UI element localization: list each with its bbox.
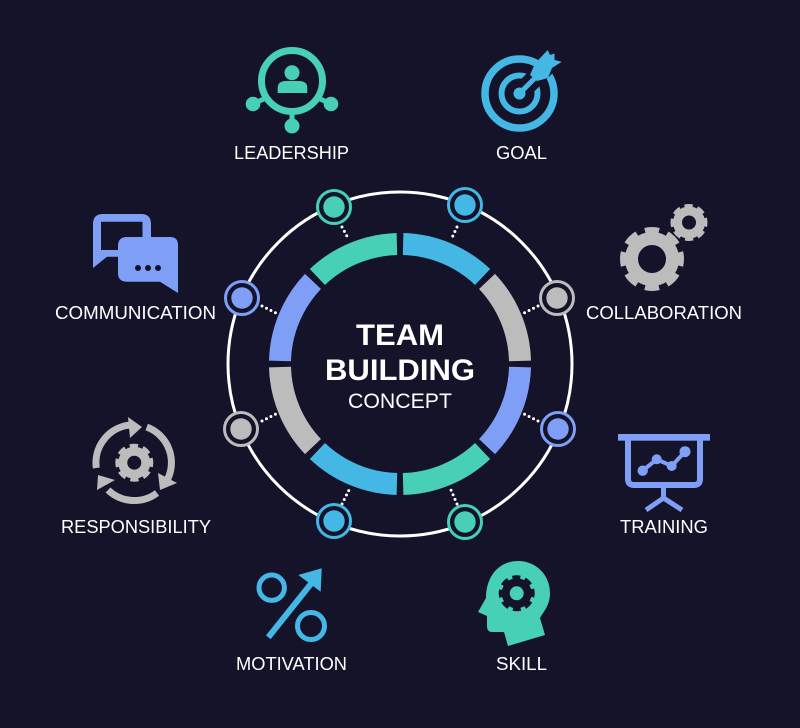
segmented donut [280,244,520,484]
node: leadership [318,190,350,224]
center title [325,319,475,413]
segment: lavender lower right [487,367,520,447]
segment: gray lower left [280,367,313,447]
node: communication [226,282,258,314]
label: skill: SKILL [496,654,547,674]
label: training: TRAINING [620,517,708,537]
icon: leadership [246,50,338,134]
icon: goal [485,50,562,128]
node: training [542,412,574,446]
segment: teal bottom right [403,451,483,484]
node: collaboration [540,282,574,314]
node: goal [448,188,482,222]
icon: responsibility [96,417,177,501]
label: responsibility: RESPONSIBILITY [61,517,211,537]
label: motivation: MOTIVATION [236,654,347,674]
icon: collaboration gears [624,206,705,288]
segment: blue top right [403,244,483,277]
segment: gray upper right [487,281,520,361]
icon: skill [478,561,550,646]
dotted connectors [262,227,538,504]
icon: communication [93,214,178,293]
segment: lavender upper left [280,281,313,361]
node: skill [448,506,482,538]
center title: TEAM [356,319,444,352]
label: goal: GOAL [496,143,547,163]
segment: blue bottom left [317,451,397,484]
label: communication: COMMUNICATION [55,303,216,323]
label: collaboration: COLLABORATION [586,303,742,323]
node: motivation [318,504,350,538]
center title: CONCEPT [348,390,452,413]
node: responsibility [224,412,258,446]
segment: teal top left [317,244,397,277]
icon: training [618,434,710,510]
icon: motivation [259,568,324,640]
outer white ring [228,192,572,536]
label: leadership: LEADERSHIP [234,143,349,163]
center title: BUILDING [325,354,475,387]
